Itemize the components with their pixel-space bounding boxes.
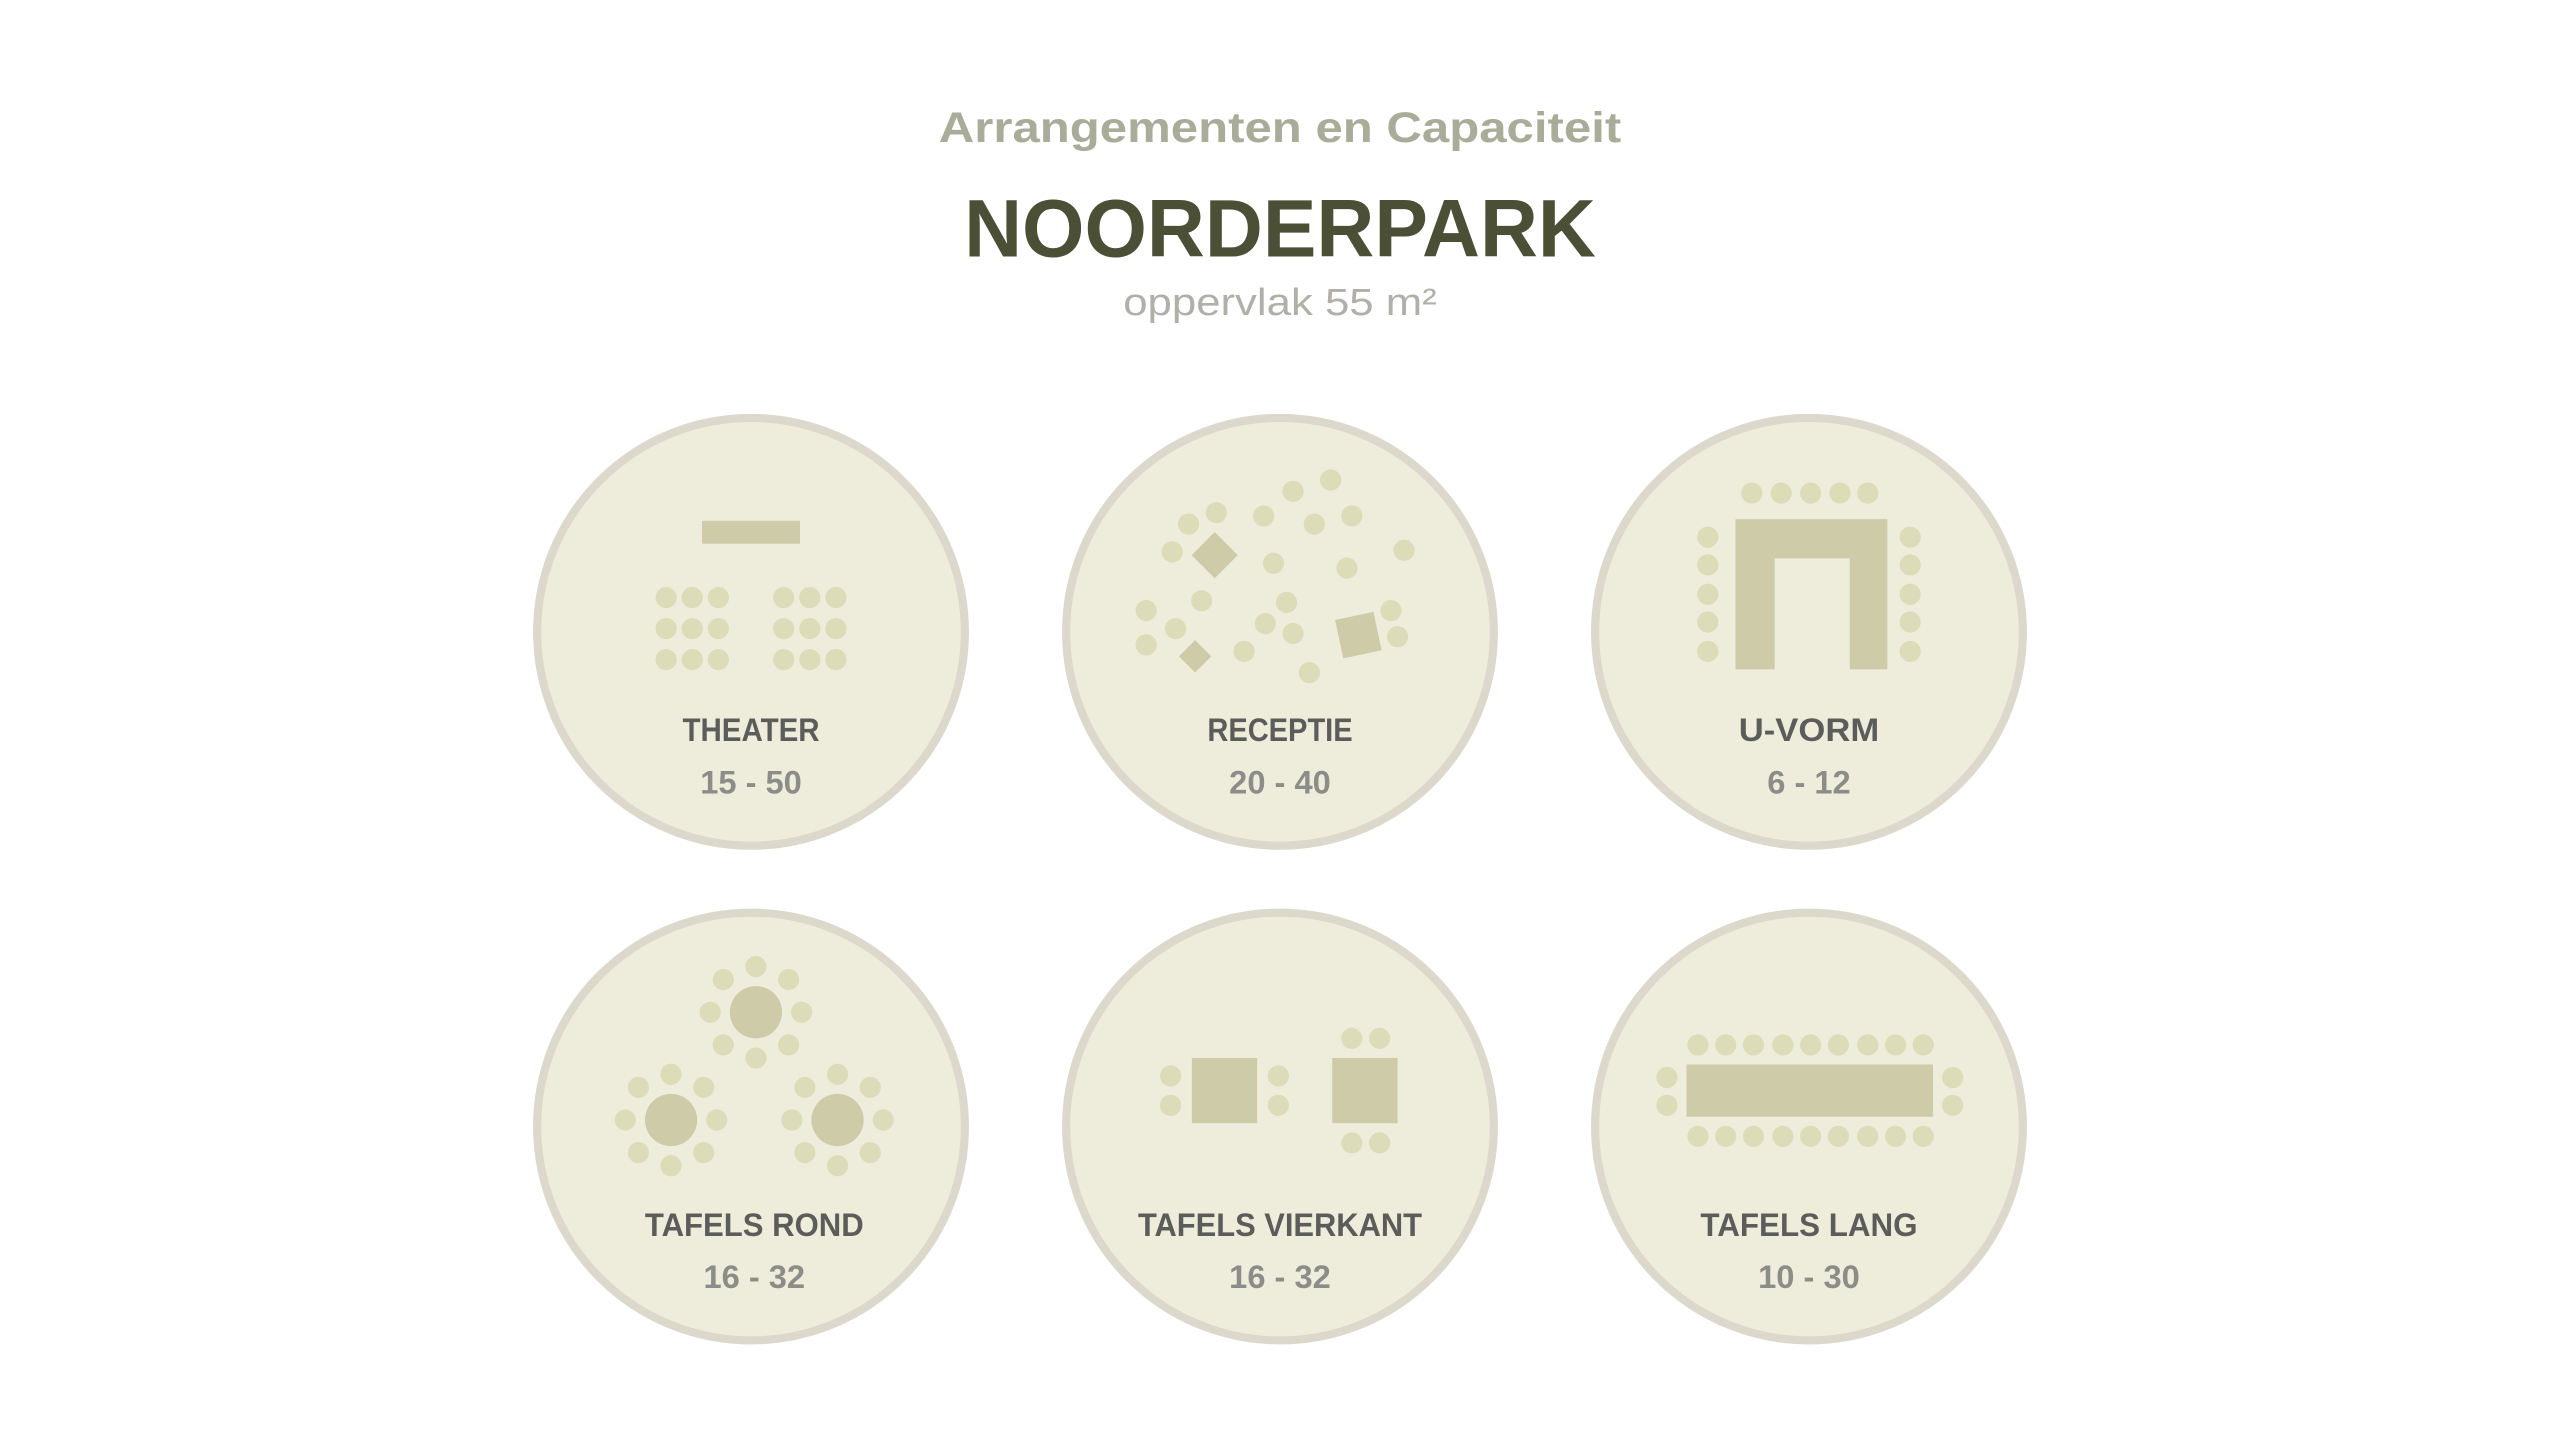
panel: tafels vierkant (1066, 913, 1494, 1340)
label: theater: THEATER (682, 711, 820, 748)
label: tafels rond: TAFELS ROND (645, 1206, 864, 1243)
subtitle: Arrangementen en Capaciteit (939, 104, 1621, 151)
panel: receptie (1066, 418, 1494, 846)
icon: u-vorm layout (1697, 482, 1921, 669)
capacity: tafels lang: 10 - 30 (1758, 1258, 1860, 1295)
icon: receptie layout (1136, 469, 1415, 683)
panel: tafels rond (537, 913, 965, 1340)
area text: oppervlak 55 m² (1123, 281, 1437, 323)
icon: square tables (1160, 1028, 1398, 1153)
capacity: tafels rond: 16 - 32 (703, 1258, 805, 1295)
capacity: tafels vierkant: 16 - 32 (1229, 1258, 1331, 1295)
capacity: theater: 15 - 50 (700, 763, 802, 800)
icon: long table (1656, 1034, 1963, 1147)
panel: u-vorm (1595, 418, 2023, 846)
capacity: u-vorm: 6 - 12 (1767, 763, 1851, 800)
label: u-vorm: U-VORM (1739, 711, 1879, 748)
label: tafels vierkant: TAFELS VIERKANT (1138, 1206, 1422, 1243)
capacity: receptie: 20 - 40 (1229, 763, 1331, 800)
panel: tafels lang (1595, 913, 2023, 1340)
label: tafels lang: TAFELS LANG (1700, 1206, 1918, 1243)
panel: theater (537, 418, 965, 846)
icon: round tables (615, 956, 894, 1176)
title: NOORDERPARK (964, 183, 1596, 274)
icon: theater layout (656, 521, 847, 670)
label: receptie: RECEPTIE (1207, 711, 1353, 748)
